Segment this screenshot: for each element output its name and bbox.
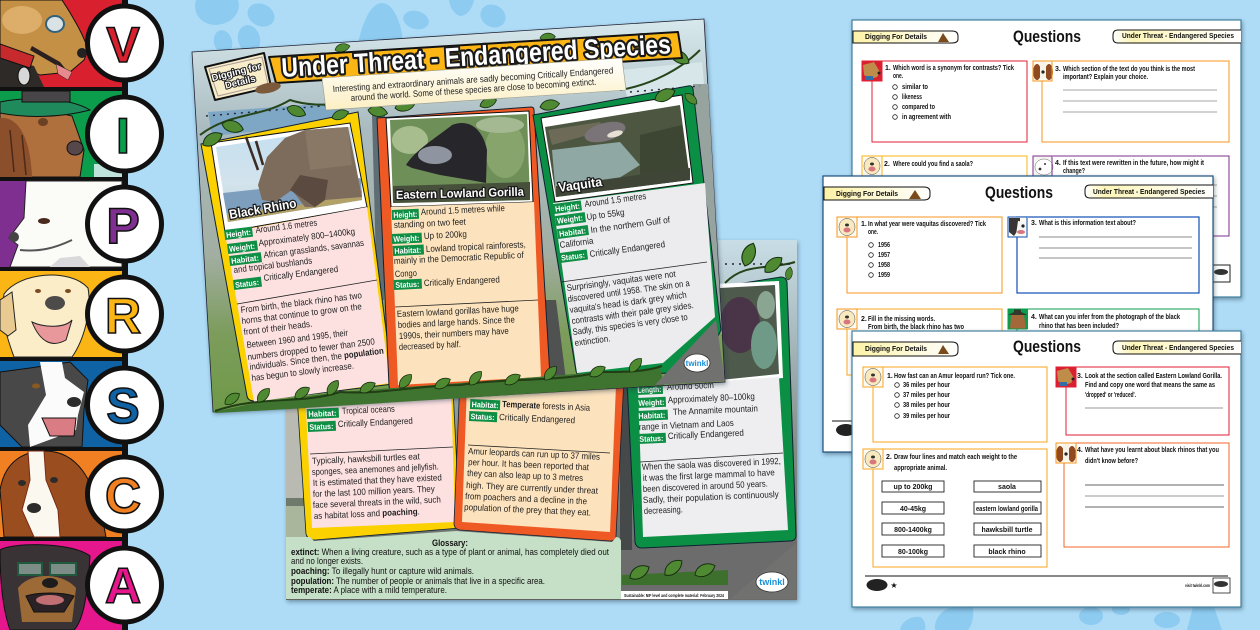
panel: second poster page <box>286 240 797 600</box>
vaquita description <box>566 269 694 348</box>
rhino description: has begun to slowly increase. <box>251 361 354 383</box>
vaquita description: Surprisingly, vaquitas were not <box>566 269 677 293</box>
gorilla fact rows: mainly in the Democratic Republic of <box>394 250 524 266</box>
copyright strip: Sustainable: NIF level and complete material: February 2024 <box>624 593 724 598</box>
rhino fact rows: and tropical bushlands <box>233 255 313 275</box>
hawksbill fact rows: Habitat: <box>308 409 337 419</box>
vaquita fact rows: In the northern Gulf of <box>590 215 671 235</box>
letter badge V: V <box>106 17 140 73</box>
header tag right <box>1085 185 1213 198</box>
rhino fact rows: Approximately 800–1400kg <box>258 226 356 248</box>
question 1: 1. <box>887 373 893 380</box>
rhino description: numbers dropped to fewer than 2500 <box>247 336 375 362</box>
hawksbill description <box>312 451 442 521</box>
leopard description: per hour. It has been reported that <box>468 457 590 472</box>
hawksbill fact rows: Status: <box>309 422 334 432</box>
photo: black rhino: Black Rhino <box>228 195 298 222</box>
question 2 <box>862 156 1027 186</box>
vines on second page <box>622 241 795 585</box>
leopard fact rows: Temperate forests in Asia <box>502 399 590 413</box>
vaquita fact rows: California <box>559 236 594 250</box>
question 2 matching: saola <box>998 484 1016 491</box>
leopard description: high. They are currently under threat <box>466 480 599 496</box>
question 3: Look at the section called Eastern Lowland Gorilla. <box>1085 373 1222 380</box>
glossary <box>286 531 621 599</box>
glossary: population: The number of people or animals that live in a specific area. <box>291 576 545 586</box>
header tag left: Digging For Details <box>865 32 927 41</box>
vaquita fact rows: Around 1.5 metres <box>584 191 647 209</box>
rhino description: front of their heads. <box>243 319 313 337</box>
letter badge P: P <box>106 198 140 254</box>
question 2 matching: eastern lowland gorilla <box>976 506 1038 513</box>
question 4 <box>1056 443 1229 547</box>
question 1: likeness <box>902 94 922 101</box>
header tag left <box>853 342 958 356</box>
letter badge P <box>88 187 162 261</box>
question 2 matching: Draw four lines and match each weight to the <box>894 454 1017 461</box>
letter badge A <box>88 548 162 622</box>
gorilla fact rows: Habitat: <box>394 246 422 256</box>
gorilla fact rows: standing on two feet <box>394 217 466 230</box>
question 2 matching <box>863 449 1047 567</box>
question 4: change? <box>1063 168 1085 175</box>
question 2 matching: 80-100kg <box>898 549 928 556</box>
letter badge C <box>88 457 162 531</box>
vaquita fact rows <box>553 191 671 263</box>
saola fact rows: Around 50cm <box>667 380 714 392</box>
photo: gorilla <box>390 114 530 203</box>
photo: saola <box>716 281 783 384</box>
gorilla fact rows: Height: <box>393 210 418 220</box>
hawksbill description: as habitat loss and poaching. <box>314 506 420 521</box>
question 1: in agreement with <box>902 114 951 121</box>
footer <box>865 576 1230 593</box>
question 3 <box>1008 217 1199 293</box>
title banner: Under Threat - Endangered Species <box>281 29 672 83</box>
saola fact rows <box>636 380 758 444</box>
question 1: In what year were vaquitas discovered? Tick <box>868 221 986 228</box>
question 4: rhino that has been included? <box>1039 323 1119 330</box>
gorilla fact rows: Congo <box>395 268 417 279</box>
footer: ★ <box>890 581 898 590</box>
saola description: been discovered in around 50 years. <box>643 479 768 494</box>
photo: gorilla: Eastern Lowland Gorilla <box>396 185 524 202</box>
vaquita fact rows: Critically Endangered <box>589 239 666 259</box>
gorilla fact rows: Lowland tropical rainforests, <box>426 239 526 254</box>
header tag right <box>1113 341 1241 354</box>
badge: Digging for Details: Digging for <box>210 61 263 84</box>
vaquita description: vaquita's head is dark grey which <box>569 290 687 315</box>
question 3: important? Explain your choice. <box>1063 74 1148 81</box>
question 2 matching: 800-1400kg <box>894 527 932 534</box>
question 1: similar to <box>902 84 928 91</box>
gorilla fact rows: Up to 200kg <box>424 229 467 241</box>
intro text box <box>322 58 626 110</box>
rhino fact rows <box>224 217 365 290</box>
letter badge I <box>88 97 162 171</box>
copyright strip <box>621 591 728 599</box>
vaquita fact rows: Weight: <box>557 213 584 226</box>
gorilla description: Eastern lowland gorillas have huge <box>397 303 519 319</box>
header tag left: Digging For Details <box>865 344 927 353</box>
rhino description: individuals. Since then, the population <box>249 346 384 372</box>
question 2 matching: up to 200kg <box>894 484 932 491</box>
question 1: 1. <box>861 221 867 228</box>
question 1: 1959 <box>878 272 890 279</box>
letter badge C: C <box>105 468 141 524</box>
letter badge S: S <box>106 378 140 434</box>
question 1: 1957 <box>878 252 890 259</box>
gorilla description <box>397 303 519 352</box>
leopard fact rows: Habitat: <box>471 400 499 410</box>
question 4: What can you infer from the photograph of the black <box>1039 314 1180 321</box>
leopard fact rows <box>469 399 590 425</box>
panel: VIPERS dog strip <box>0 0 162 630</box>
question 3: Which section of the text do you think is the most <box>1063 66 1196 73</box>
card: vaquita <box>533 86 721 376</box>
header tag left: Digging For Details <box>836 189 898 198</box>
rhino description: Between 1960 and 1995, their <box>246 328 348 350</box>
folded corner with logo <box>730 543 796 599</box>
question 2: 2. <box>861 316 867 323</box>
question 3: 'dropped' or 'reduced'. <box>1085 392 1136 399</box>
question 1: 1958 <box>878 262 890 269</box>
question 1: 39 miles per hour <box>903 413 950 420</box>
folded corner with logo: twinkl <box>686 359 708 368</box>
letter badge R: R <box>105 288 141 344</box>
folded corner with logo <box>655 320 725 385</box>
question 2: Fill in the missing words. <box>868 316 935 323</box>
saola fact rows: Habitat: <box>638 411 666 421</box>
leopard fact rows: Status: <box>470 412 495 422</box>
header tag left <box>824 187 930 200</box>
rhino description: From birth, the black rhino has two <box>240 290 362 315</box>
question 2 matching: 40-45kg <box>900 506 926 513</box>
gorilla fact rows: Weight: <box>393 234 420 244</box>
rhino fact rows: Weight: <box>229 242 256 254</box>
saola fact rows: Status: <box>639 434 664 444</box>
bottom vines <box>213 355 664 413</box>
gorilla fact rows: Around 1.5 metres while <box>421 203 505 217</box>
band: C orange with spaniel <box>0 451 122 537</box>
rhino fact rows: Around 1.6 metres <box>255 217 318 235</box>
hawksbill description: It is estimated that they have existed <box>313 472 442 488</box>
vaquita description: extinction. <box>574 333 611 348</box>
letter badge R <box>88 277 162 351</box>
footer: visit twinkl.com <box>1185 583 1210 588</box>
question 3 <box>1033 61 1229 142</box>
question 2: 2. <box>884 161 890 168</box>
rhino fact rows: Height: <box>226 228 252 240</box>
saola description: When the saola was discovered in 1992, <box>642 456 781 472</box>
hawksbill fact rows: Tropical oceans <box>342 404 395 416</box>
card: hawksbill turtle <box>296 370 460 540</box>
question 2: From birth, the black rhino has two <box>868 324 964 331</box>
vaquita description: contrasts with their pale grey sides. <box>571 300 694 326</box>
question 1: 1956 <box>878 242 890 249</box>
question 1: compared to <box>902 104 935 111</box>
vaquita fact rows: Height: <box>555 202 581 214</box>
leopard description: from poachers and a decline in the <box>465 491 587 506</box>
gorilla description: 1990s, their numbers may have <box>399 326 509 341</box>
saola fact rows: Critically Endangered <box>668 428 744 441</box>
question 2: Where could you find a saola? <box>893 161 973 168</box>
question 1 <box>863 367 1047 442</box>
heading: Questions <box>1013 337 1081 356</box>
header tag right: Under Threat - Endangered Species <box>1093 187 1205 196</box>
question 1: Which word is a synonym for contrasts? Tick <box>893 65 1014 72</box>
saola description: decreasing. <box>644 504 683 516</box>
top vines <box>200 32 700 150</box>
leopard description: Amur leopards can run up to 37 miles <box>468 446 601 462</box>
saola fact rows: The Annamite mountain <box>673 403 758 417</box>
question 1: How fast can an Amur leopard run? Tick one. <box>894 373 1015 380</box>
glossary: and no longer exists. <box>291 556 363 566</box>
leopard fact rows: Critically Endangered <box>499 412 575 425</box>
letter badge A: A <box>105 558 141 614</box>
card: amur leopard <box>454 378 624 541</box>
question 2 matching: appropriate animal. <box>894 465 947 472</box>
vaquita description: discovered until 1958. The skin on a <box>567 278 690 304</box>
saola description: Sadly, their population is continuously <box>643 489 779 505</box>
question 1 <box>837 217 1002 293</box>
card: saola <box>627 277 796 548</box>
band: I green with bloodhound <box>0 91 122 177</box>
question 2 matching: black rhino <box>988 549 1026 556</box>
intro text box: Interesting and extraordinary animals are sadly becoming Critically Endangered <box>332 65 614 94</box>
saola fact rows: range in Vietnam and Laos <box>639 418 734 432</box>
question 3: Find and copy one word that means the same as <box>1085 382 1215 389</box>
glossary: poaching: To illegally hunt or capture wild animals. <box>291 566 474 576</box>
header tag left <box>853 31 958 43</box>
question 3: 3. <box>1077 373 1083 380</box>
vaquita description: Sadly, this species is very close to <box>572 312 688 337</box>
gorilla fact rows <box>392 203 526 290</box>
heading: Questions <box>985 183 1053 202</box>
hawksbill fact rows: Critically Endangered <box>338 416 413 429</box>
saola description: it was the first large mammal to have <box>643 467 775 483</box>
band: R yellow with golden dog <box>0 271 122 357</box>
question 2 matching: 2. <box>886 454 892 461</box>
folded corner with logo: twinkl <box>759 577 785 587</box>
question 4 <box>1008 309 1199 349</box>
hawksbill description: sponges, sea anemones and jellyfish. <box>312 461 439 477</box>
vaquita fact rows: Up to 55kg <box>586 207 625 222</box>
heading: Questions <box>1013 27 1081 46</box>
scenery band <box>206 62 722 380</box>
letter badge I: I <box>116 108 130 164</box>
card: black rhino <box>201 112 393 402</box>
footer icon <box>1213 265 1230 282</box>
intro text box: around the world. Some of these species are close to becoming extinct. <box>350 77 597 103</box>
gorilla description: decreased by half. <box>399 339 461 352</box>
rhino fact rows: Habitat: <box>231 253 260 266</box>
rhino description: horns that continue to grow on the <box>241 301 362 326</box>
saola description <box>642 456 781 516</box>
gorilla fact rows: Critically Endangered <box>424 274 500 288</box>
rhino description <box>240 290 384 383</box>
question 1: 36 miles per hour <box>903 382 950 389</box>
header tag right: Under Threat - Endangered Species <box>1122 343 1234 352</box>
leopard description <box>464 446 601 518</box>
card: eastern lowland gorilla <box>377 107 550 390</box>
band: A pink with rottweiler <box>0 541 122 630</box>
panel: main poster page <box>192 19 725 413</box>
leopard description: population of the prey that they eat. <box>464 502 591 518</box>
hawksbill description: for the last 100 million years. They <box>313 484 435 499</box>
rhino fact rows: Critically Endangered <box>263 264 339 283</box>
gorilla fact rows: Status: <box>395 280 420 290</box>
vaquita fact rows: Status: <box>561 251 586 263</box>
header tag right <box>1113 30 1241 43</box>
question 4: 4. <box>1077 447 1083 454</box>
rhino fact rows: African grasslands, savannas <box>263 238 365 260</box>
question 3 <box>1056 367 1229 435</box>
question 1: 38 miles per hour <box>903 402 950 409</box>
gorilla description: bodies and large hands. Since the <box>398 314 515 330</box>
footer logo <box>832 421 856 436</box>
worksheet B <box>823 176 1213 452</box>
badge: Digging for Details: Details <box>224 73 257 92</box>
photo: black rhino <box>216 127 362 222</box>
question 4: If this text were rewritten in the future, how might it <box>1063 160 1205 167</box>
question 1: 37 miles per hour <box>903 392 950 399</box>
question 3: 3. <box>1031 220 1037 227</box>
question 1 <box>862 61 1027 142</box>
worksheet C <box>852 331 1241 607</box>
band: S blue with collie <box>0 361 122 447</box>
glossary: extinct: When a living creature, such as a type of plant or animal, has completely died out <box>291 547 609 557</box>
letter badge V <box>88 6 162 80</box>
question 1: 1. <box>885 65 891 72</box>
question 4: didn't know before? <box>1085 458 1138 465</box>
hawksbill fact rows <box>307 404 413 432</box>
glossary: temperate: A place with a mild temperature. <box>291 585 447 595</box>
badge: Digging for Details <box>205 53 282 100</box>
question 1: one. <box>893 73 903 80</box>
saola fact rows: Length: <box>637 385 662 395</box>
question 3: 3. <box>1055 66 1061 73</box>
glossary: Glossary: <box>432 538 468 548</box>
question 4: 4. <box>1055 160 1061 167</box>
header tag right: Under Threat - Endangered Species <box>1122 31 1234 40</box>
band: P purple with white dog <box>0 181 122 267</box>
hawksbill description: Typically, hawksbill turtles eat <box>312 451 420 466</box>
question 2 matching: hawksbill turtle <box>982 527 1033 534</box>
question 4 <box>1033 156 1229 236</box>
vaquita fact rows: Habitat: <box>559 226 587 239</box>
photo: vaquita <box>545 105 690 197</box>
letter badge S <box>88 368 162 442</box>
photo: vaquita: Vaquita <box>557 174 604 195</box>
band: V red with tan dog <box>0 0 122 87</box>
question 2 <box>837 309 1002 375</box>
rhino fact rows: Status: <box>235 278 260 290</box>
leopard description: they can also leap up to 3 metres <box>467 468 584 483</box>
worksheet A <box>852 20 1241 297</box>
question 4: 4. <box>1031 314 1037 321</box>
hawksbill description: face several threats in the wild, such <box>313 494 441 510</box>
question 1: one. <box>868 229 878 236</box>
question 3: What is this information text about? <box>1039 220 1136 227</box>
saola fact rows: Approximately 80–100kg <box>668 391 755 405</box>
question 4: What have you learnt about black rhinos that you <box>1085 447 1219 454</box>
saola fact rows: Weight: <box>638 398 665 408</box>
